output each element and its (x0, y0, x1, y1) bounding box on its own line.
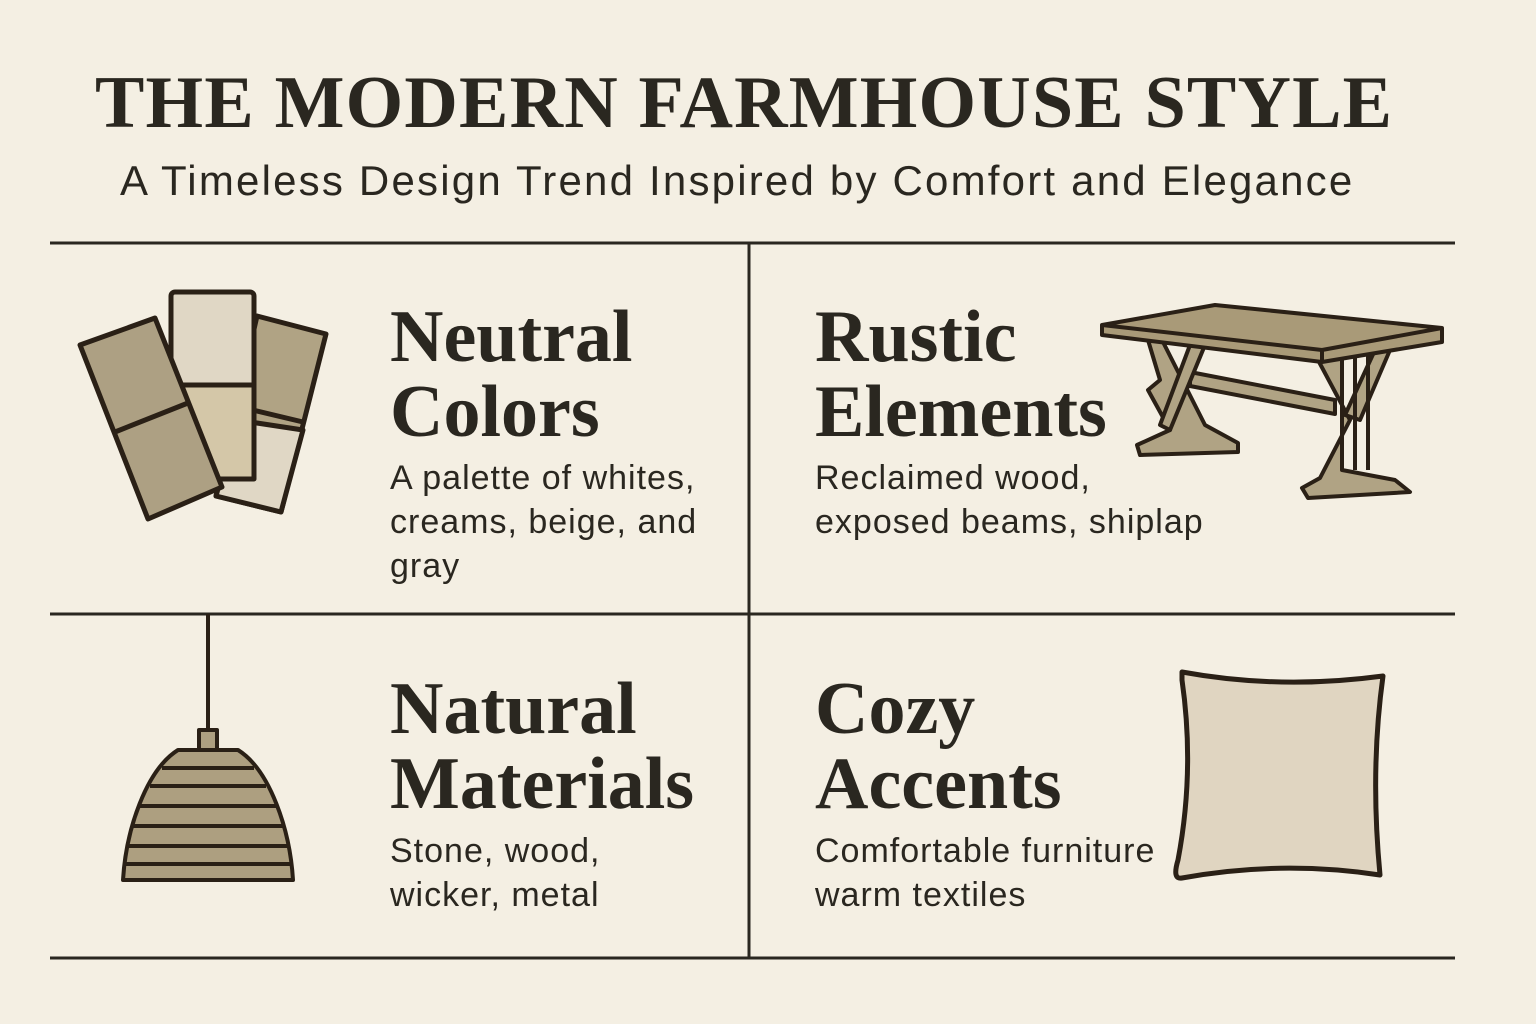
icon: pillow (1173, 670, 1386, 881)
body text: Reclaimed wood, (815, 459, 1091, 497)
heading: Neutral (390, 296, 632, 378)
icon: color swatches (78, 290, 328, 522)
icon: pendant lamp (121, 614, 295, 882)
body text (815, 459, 1204, 541)
title: THE MODERN FARMHOUSE STYLE (95, 62, 1393, 144)
body text: A palette of whites, (390, 459, 695, 497)
panel: neutral colors (78, 290, 697, 585)
panel: natural materials (121, 614, 694, 914)
body text: warm textiles (815, 876, 1026, 914)
body text: exposed beams, shiplap (815, 503, 1204, 541)
heading: Elements (815, 371, 1107, 453)
heading: Accents (815, 743, 1062, 825)
heading (815, 668, 1062, 825)
heading: Materials (390, 743, 694, 825)
body text: Stone, wood, (390, 832, 600, 870)
panel: rustic elements (815, 296, 1444, 541)
body text: Comfortable furniture (815, 832, 1155, 870)
body text: wicker, metal (390, 876, 600, 914)
body text: creams, beige, and (390, 503, 697, 541)
panel: cozy accents (815, 668, 1386, 914)
heading: Cozy (815, 668, 975, 750)
icon: farmhouse table (1100, 303, 1444, 500)
heading: Natural (390, 668, 637, 750)
body text (815, 832, 1155, 914)
body text: gray (390, 547, 460, 585)
heading (390, 668, 694, 825)
body text (390, 832, 600, 914)
body text (390, 459, 697, 585)
subtitle: A Timeless Design Trend Inspired by Comfort and Elegance (120, 157, 1354, 204)
heading: Rustic (815, 296, 1016, 378)
heading: Colors (390, 371, 600, 453)
heading (815, 296, 1107, 453)
heading (390, 296, 632, 453)
